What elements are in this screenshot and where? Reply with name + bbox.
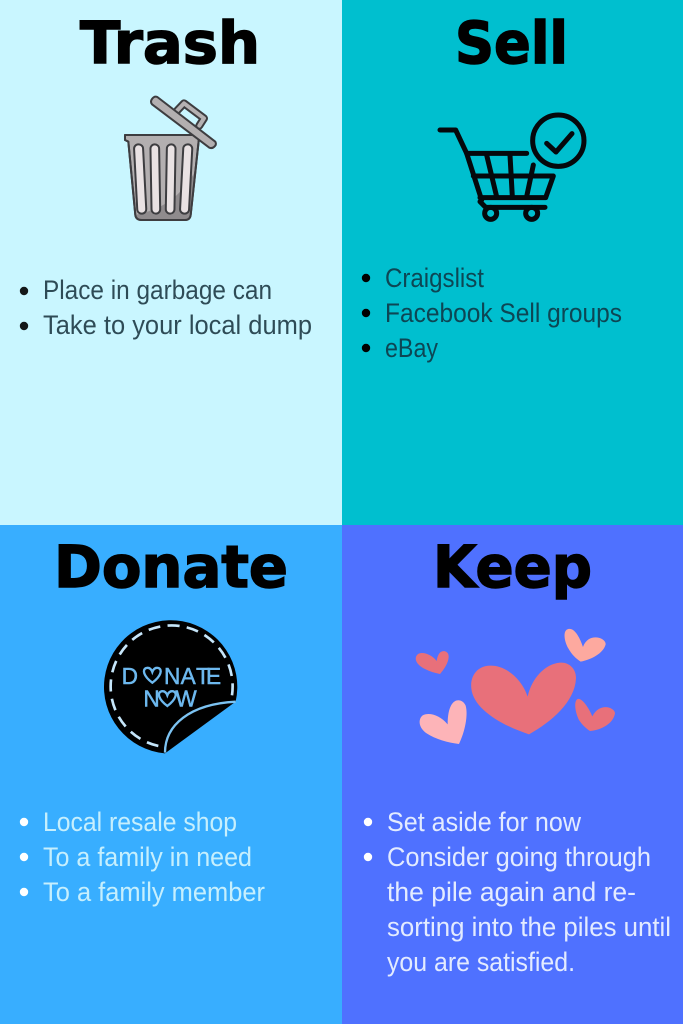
icon: donate now sticker: DONATE [122,663,221,689]
panel: sell [342,0,683,525]
bullet list: keep: the pile again and re- [387,877,636,907]
bullet list: keep: you are satisfied. [387,947,575,977]
heading: Keep: Keep [433,533,592,601]
icon: trash can [125,97,216,220]
icon: hearts [416,629,615,744]
bullet list: keep: Set aside for now [387,807,582,837]
bullet list: keep [364,807,671,977]
bullet list: sell: Craigslist [385,263,485,293]
bullet list: donate [20,807,265,907]
heading: Donate: Donate [54,533,288,601]
bullet list: sell: eBay [385,333,439,363]
icon: donate now sticker [104,620,237,753]
icon: shopping cart with check mark [440,115,584,219]
bullet list: trash [20,275,312,340]
heading: Sell: Sell [455,9,568,77]
bullet list: sell [362,263,622,363]
bullet list: trash: Place in garbage can [43,275,272,305]
bullet list: trash: Take to your local dump [43,310,312,340]
icon: donate now sticker: NOW [143,686,197,712]
bullet list: donate: Local resale shop [43,807,237,837]
panel: trash [0,0,342,525]
bullet list: keep: sorting into the piles until [387,912,671,942]
bullet list: keep: Consider going through [387,842,651,872]
heading: Trash: Trash [80,9,260,77]
bullet list: donate: To a family in need [43,842,252,872]
bullet list: sell: Facebook Sell groups [385,298,622,328]
bullet list: donate: To a family member [43,877,265,907]
icon: heart letter in NOW [159,691,176,706]
panel: keep [342,525,683,1024]
panel: donate [0,525,342,1024]
icon: heart letter in DONATE [144,668,161,683]
